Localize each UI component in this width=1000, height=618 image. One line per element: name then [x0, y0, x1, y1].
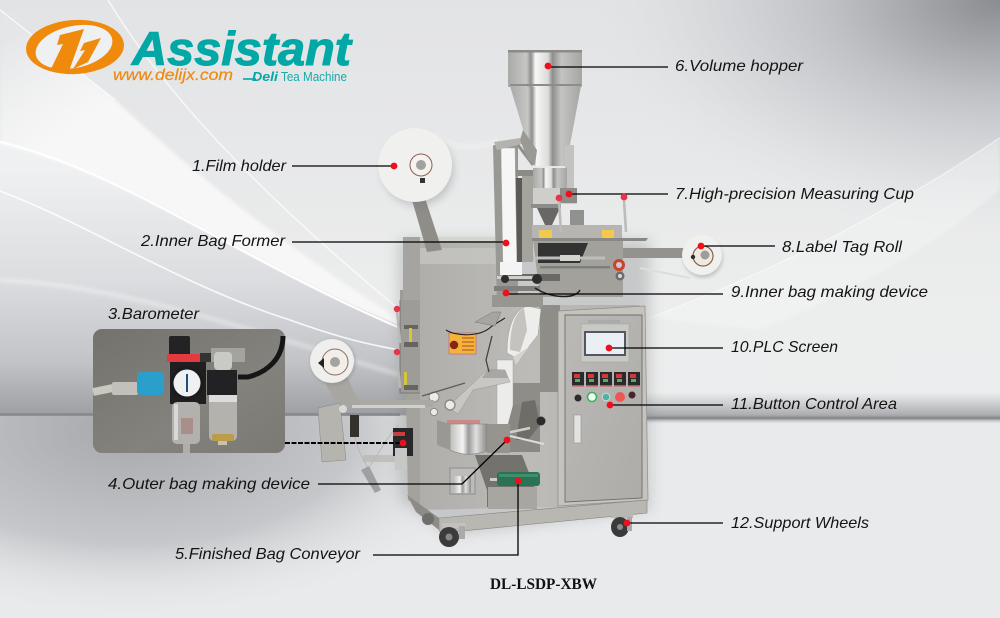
plate — [211, 348, 245, 362]
labels: 3.Barometer — [108, 306, 200, 323]
wheels — [422, 513, 633, 547]
outer bag mechanism — [437, 400, 546, 454]
brand name: Assistant — [131, 22, 353, 75]
label tag roll — [623, 235, 723, 278]
left label roll unit — [310, 339, 465, 493]
labels: 9.Inner bag making device — [731, 284, 928, 301]
fittings — [112, 382, 138, 395]
model name: DL-LSDP-XBW — [490, 576, 597, 593]
tagline: Tea Machine — [281, 70, 347, 84]
pressure gauge — [170, 366, 204, 400]
measuring cup — [531, 188, 584, 225]
handle right — [624, 200, 626, 232]
labels: 4.Outer bag making device — [108, 476, 310, 493]
finished bag conveyor — [450, 455, 540, 509]
black hose — [238, 336, 283, 377]
labels — [108, 58, 928, 563]
barometer photo — [93, 329, 285, 453]
regulator top — [169, 336, 190, 356]
callout dots — [391, 63, 704, 526]
film path — [435, 133, 533, 275]
top shelf — [532, 200, 648, 241]
air regulator on machine — [393, 428, 413, 456]
machine shadow — [398, 240, 650, 535]
labels: 11.Button Control Area — [731, 396, 897, 413]
PLC screen — [581, 320, 629, 362]
film holder roll — [378, 128, 454, 252]
volume hopper — [508, 50, 582, 190]
platform — [439, 500, 647, 533]
temperature displays — [572, 372, 640, 386]
machine body — [400, 237, 647, 533]
side handles — [394, 306, 400, 388]
connector — [200, 353, 211, 362]
left filter bowl — [172, 402, 200, 453]
control buttons — [574, 392, 636, 402]
callout lines — [285, 67, 775, 555]
control cabinet — [558, 306, 648, 506]
labels: 7.High-precision Measuring Cup — [675, 186, 914, 203]
tagline: Deli — [252, 70, 279, 84]
website: www.delijx.com — [113, 67, 233, 84]
machine — [310, 50, 723, 547]
air hose — [93, 388, 113, 392]
labels: 6.Volume hopper — [675, 58, 804, 75]
labels: 12.Support Wheels — [731, 515, 869, 532]
labels: 1.Film holder — [192, 158, 287, 175]
labels: 5.Finished Bag Conveyor — [175, 546, 361, 563]
tagline — [243, 70, 347, 84]
red band — [167, 354, 200, 362]
labels: 8.Label Tag Roll — [782, 239, 902, 256]
labels: 2.Inner Bag Former — [140, 233, 286, 250]
inner bag chute — [429, 306, 541, 433]
regulator body — [170, 362, 206, 404]
upper mechanism — [492, 145, 625, 307]
blue coupler — [137, 372, 164, 395]
handle left — [559, 200, 561, 232]
logo — [25, 17, 353, 84]
warning sticker — [449, 333, 476, 354]
right filter unit — [207, 352, 237, 445]
labels: 10.PLC Screen — [731, 339, 838, 356]
logo mark — [25, 17, 125, 77]
